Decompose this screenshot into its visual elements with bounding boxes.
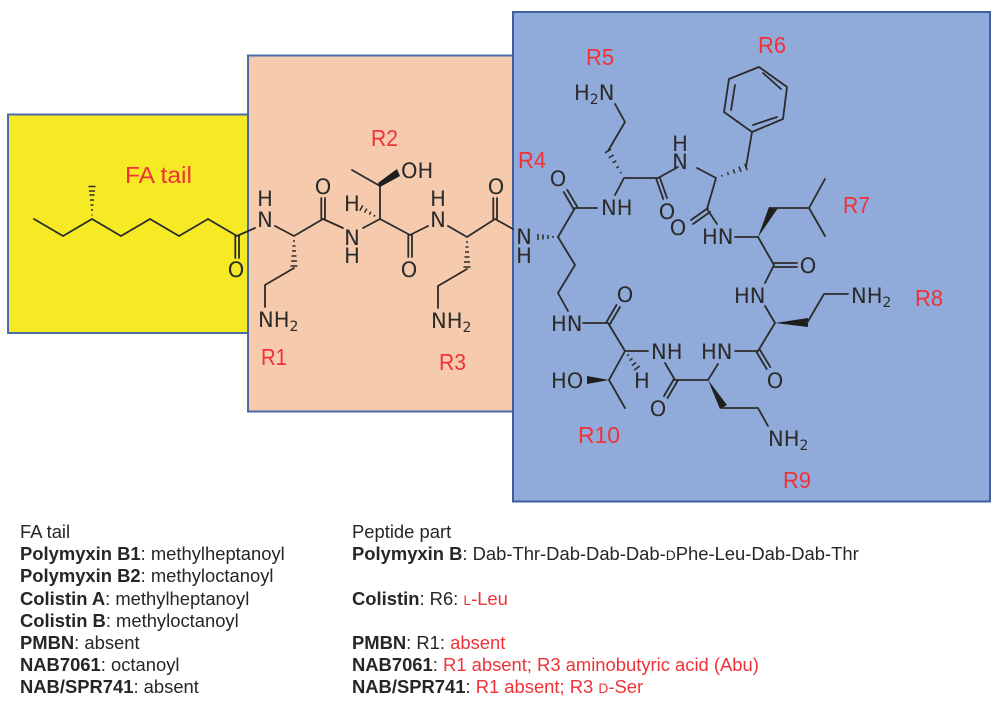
chemical structure: R7 leucine residue xyxy=(702,179,825,283)
chemical structure: R6 D-phenylalanine residue xyxy=(670,67,787,240)
label: R1: R1 xyxy=(261,344,287,370)
label: R9: R9 xyxy=(783,467,811,493)
label: R7: R7 xyxy=(843,192,870,218)
label: R3: R3 xyxy=(439,349,466,375)
chemical structure: R2 threonine residue: H xyxy=(344,192,360,216)
chemical structure: R4 residue: NH xyxy=(601,196,632,220)
text block: peptide part variants xyxy=(352,521,859,697)
chemical structure: R4 residue xyxy=(516,167,632,336)
label: R8: R8 xyxy=(915,285,943,311)
text block: peptide part variants: PMBN: R1: absent xyxy=(352,632,505,653)
label: FA tail: FA tail xyxy=(125,162,192,188)
text block: FA tail variants xyxy=(20,521,285,697)
chemical structure: R3 residue: 2 xyxy=(462,320,471,336)
chemical structure: R5 residue: O xyxy=(659,200,675,224)
text block: FA tail variants: Colistin B: methyloctanoyl xyxy=(20,610,239,631)
text block: peptide part variants: Colistin: R6: L-Leu xyxy=(352,588,508,609)
chemical structure: R10 threonine residue: HO xyxy=(551,369,583,393)
chemical structure: R4 residue: HN xyxy=(551,312,582,336)
chemical structure: R1 residue xyxy=(257,175,331,335)
chemical structure: R2 threonine residue xyxy=(323,159,433,282)
chemical structure: R5 residue: N xyxy=(599,81,614,105)
chemical structure: R2 threonine residue: N xyxy=(344,226,360,250)
chemical structure: R7 leucine residue: HN xyxy=(702,225,734,249)
chemical structure: R4 residue: O xyxy=(550,167,566,191)
chemical structure: R3 residue xyxy=(430,175,513,336)
chemical structure: R2 threonine residue: H xyxy=(344,244,360,268)
chemical structure: fatty acid tail xyxy=(34,186,255,282)
chemical structure: R1 residue: N xyxy=(257,208,273,232)
chemical structure: R1 residue: NH xyxy=(258,308,290,332)
chemical structure: R8 residue: O xyxy=(767,369,783,393)
panel: FA tail background xyxy=(8,114,248,333)
chemical structure: R2 threonine residue: O xyxy=(401,258,417,282)
chemical structure: R8 residue xyxy=(734,284,891,393)
label: R2: R2 xyxy=(371,125,398,151)
label: R10: R10 xyxy=(578,422,620,448)
label: R6: R6 xyxy=(758,32,786,58)
chemical structure: R3 residue: H xyxy=(430,187,446,211)
chemical structure: R9 residue: 2 xyxy=(800,438,808,454)
chemical structure: R10 threonine residue: H xyxy=(634,369,650,393)
chemical structure: R1 residue: 2 xyxy=(290,319,298,335)
chemical structure: R8 residue: 2 xyxy=(882,295,891,311)
text block: peptide part variants: NAB7061: R1 absent; R3 aminobutyric acid (Abu) xyxy=(352,654,759,675)
chemical structure: R6 D-phenylalanine residue: O xyxy=(670,216,686,240)
panel: cyclic peptide background xyxy=(513,12,990,502)
chemical structure: R10 threonine residue: O xyxy=(617,283,633,307)
chemical structure: R5 residue xyxy=(574,81,678,224)
chemical structure: R10 threonine residue xyxy=(551,283,682,408)
text block: FA tail variants: NAB7061: octanoyl xyxy=(20,654,179,675)
chemical structure: R6 D-phenylalanine residue: N xyxy=(672,150,688,174)
chemical structure: R3 residue: NH xyxy=(431,309,462,333)
text block: FA tail variants: Polymyxin B2: methyloctanoyl xyxy=(20,565,274,586)
chemical structure: R1 residue: O xyxy=(315,175,331,199)
chemical structure: R8 residue: NH xyxy=(851,284,882,308)
chemical structure: R9 residue xyxy=(650,340,808,454)
text block: FA tail variants: NAB/SPR741: absent xyxy=(20,676,199,697)
chemical structure: R9 residue: NH xyxy=(768,427,800,451)
chemical structure: R3 residue: O xyxy=(488,175,504,199)
text block: peptide part variants: NAB/SPR741: R1 absent; R3 D-Ser xyxy=(352,676,643,697)
chemical structure: R8 residue: HN xyxy=(734,284,766,308)
text block: peptide part variants: Polymyxin B: Dab-Thr-Dab-Dab-Dab-DPhe-Leu-Dab-Dab-Thr xyxy=(352,543,859,564)
text block: FA tail variants: PMBN: absent xyxy=(20,632,140,653)
chemical structure: R1 residue: H xyxy=(257,187,273,211)
text block: peptide part variants: Peptide part xyxy=(352,521,451,542)
chemical structure: R6 D-phenylalanine residue: H xyxy=(672,132,688,156)
chemical structure: R7 leucine residue: O xyxy=(800,254,816,278)
text block: FA tail variants: Colistin A: methylheptanoyl xyxy=(20,588,249,609)
chemical structure: R2 threonine residue: OH xyxy=(401,159,433,183)
chemical structure: R4 residue: N xyxy=(516,225,532,249)
text block: FA tail variants: Polymyxin B1: methylheptanoyl xyxy=(20,543,285,564)
chemical structure: R4 residue: H xyxy=(516,244,532,268)
chemical structure: R10 threonine residue: NH xyxy=(651,340,682,364)
label: R5: R5 xyxy=(586,44,614,70)
label: R4: R4 xyxy=(518,147,546,173)
chemical structure: R3 residue: N xyxy=(430,208,446,232)
chemical structure: R5 residue: 2 xyxy=(590,92,599,108)
text block: FA tail variants: FA tail xyxy=(20,521,70,542)
chemical structure: R9 residue: HN xyxy=(701,340,732,364)
chemical structure: fatty acid tail: O xyxy=(228,258,244,282)
chemical structure: R9 residue: O xyxy=(650,397,666,421)
panel: linear peptide background xyxy=(248,56,513,412)
chemical structure: R5 residue: H xyxy=(574,81,590,105)
